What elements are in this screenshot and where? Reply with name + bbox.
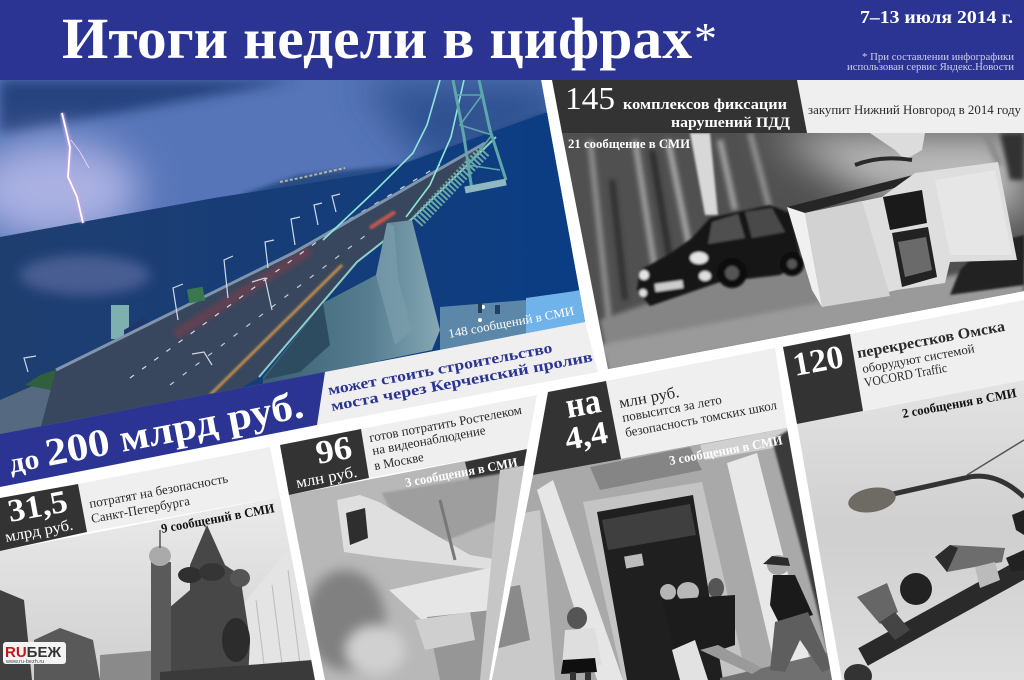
header band [0, 0, 1024, 80]
description: закупит Нижний Новгород в 2014 году [808, 102, 1021, 117]
bridge tower [453, 80, 506, 190]
panel: Saint Petersburg: млрд руб. [4, 517, 75, 546]
footnote: использован сервис Яндекс.Новости [847, 62, 1014, 73]
panel: bridge photo [0, 80, 595, 440]
description: потратят на безопасность [88, 470, 229, 511]
dark heading box [783, 334, 863, 424]
lamp posts [24, 194, 340, 372]
big figure: до [7, 444, 42, 480]
dark heading box [280, 429, 369, 495]
dark heading box [533, 381, 621, 475]
panel: Tomsk schools: повысится за лето [621, 392, 723, 425]
car [637, 205, 804, 306]
count: 3 сообщения в СМИ [404, 454, 519, 490]
panel: Omsk intersections [783, 300, 1024, 680]
dark heading box [552, 80, 807, 133]
panel: Rostelecom Moscow: млн руб. [295, 464, 359, 492]
description: готов потратить Ростелеком [368, 402, 523, 445]
panel: bridge caption: 200 млрд руб. [42, 384, 307, 475]
panel: Tomsk schools [485, 348, 835, 680]
logo: RUБЕЖ [5, 644, 61, 661]
footnote: * При составлении инфографики [862, 52, 1014, 63]
panel: Rostelecom Moscow: 96 [313, 430, 355, 472]
lightning bolt [62, 113, 89, 223]
panel: Saint Petersburg: Санкт-Петербурга [90, 493, 191, 526]
panel: Tomsk schools: безопасность томских школ [624, 397, 778, 440]
photo: car and camera box [560, 133, 1024, 373]
panel: Omsk intersections: оборудуют системой [861, 341, 976, 376]
description: перекрестков Омска [856, 319, 1007, 362]
panel: Rostelecom Moscow: в Москве [373, 449, 425, 473]
count: 148 сообщений в СМИ [447, 304, 575, 341]
title: Итоги недели в цифрах [62, 6, 692, 71]
shore and lighthouse [0, 305, 150, 434]
building below bridge [440, 290, 585, 350]
panel: bridge caption [0, 322, 598, 487]
photo: school entrance [485, 425, 835, 680]
count: 21 сообщение в СМИ [568, 136, 690, 151]
blue band [0, 372, 325, 487]
description: млн руб. [618, 384, 681, 412]
bridge deck [40, 137, 496, 430]
road sign [187, 287, 205, 303]
panel: Tomsk schools: 4,4 [562, 414, 611, 457]
count: 3 сообщения в СМИ [668, 432, 784, 468]
count: 9 сообщений в СМИ [160, 500, 276, 536]
speed camera box [787, 133, 1017, 307]
panel: traffic cameras Nizhny Novgorod: комплексов фиксации [623, 97, 787, 113]
concrete pier [263, 220, 440, 385]
panel: Omsk intersections: VOCORD Traffic [863, 360, 948, 390]
panel: bridge caption: моста через Керченский пролив [330, 349, 594, 415]
panel: Rostelecom Moscow [280, 395, 540, 680]
logo: www.ru-bezh.ru [5, 659, 44, 665]
count: 2 сообщения в СМИ [901, 385, 1018, 421]
title asterisk: * [694, 13, 717, 64]
panel: Rostelecom Moscow: на видеонаблюдение [371, 422, 487, 458]
panel: traffic cameras Nizhny Novgorod [552, 80, 1024, 373]
date: 7–13 июля 2014 г. [860, 7, 1013, 27]
dark heading box [0, 484, 87, 551]
children [561, 555, 832, 680]
panel: traffic cameras Nizhny Novgorod: 145 [565, 80, 615, 116]
suspension cables [323, 80, 464, 240]
panel: Omsk intersections: 120 [790, 339, 847, 384]
logo [3, 642, 66, 665]
photo: street lamp and cameras [790, 375, 1024, 680]
photo: cathedral [0, 490, 320, 680]
caption text: может стоить строительство [327, 340, 554, 399]
panel: Saint Petersburg: 31,5 [5, 483, 70, 529]
panel: traffic cameras Nizhny Novgorod: нарушений ПДД [671, 115, 791, 131]
panel: Saint Petersburg [0, 447, 320, 680]
truss [417, 150, 485, 222]
panel: Tomsk schools: на [562, 380, 604, 426]
photo: CCTV cameras [289, 449, 527, 680]
